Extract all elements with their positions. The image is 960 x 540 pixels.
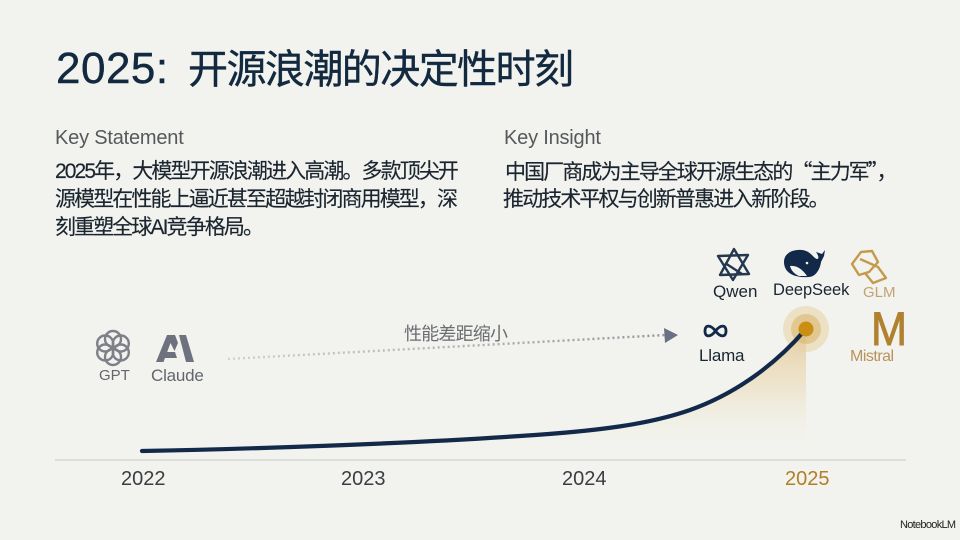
title: 2025: [56,44,169,93]
growth curve [142,330,805,451]
label: DeepSeek: DeepSeek [773,281,849,299]
heading: key insight: Key Insight [504,127,601,149]
axis label: 2022: 2022 [121,468,166,490]
title: 开源浪潮的决定性时刻 [188,48,572,92]
title [56,44,572,93]
body: key insight [503,156,896,210]
label: Claude: Claude [151,366,204,385]
body: key insight: 推动技术平权与创新普惠进入新阶段。 [503,188,828,210]
text block: key statement [55,127,458,239]
body: key statement [55,160,458,239]
label: Qwen: Qwen [713,282,757,301]
icon: DeepSeek whale [784,250,825,277]
body: key statement: 源模型在性能上逼近甚至超越封闭商用模型，深 [55,188,456,211]
area under curve [520,330,806,440]
heading: key statement: Key Statement [55,127,184,149]
icon: GLM [852,251,886,283]
icon: Claude [156,335,194,362]
axis label: 2024: 2024 [562,468,606,490]
body: key statement: 刻重塑全球AI竞争格局。 [55,216,262,239]
icon: Llama infinity [705,326,726,336]
body: key statement: 2025年，大模型开源浪潮进入高潮。多款顶尖开 [55,160,457,183]
label: GPT: GPT [99,367,130,384]
watermark: NotebookLM: NotebookLM [900,519,955,531]
axis label: 2023: 2023 [341,468,386,490]
icon: Mistral M: M [871,302,907,355]
label: Mistral: Mistral [850,348,894,365]
body: key insight: 中国厂商成为主导全球开源生态的“主力军”， [505,156,896,186]
label: Llama: Llama [699,346,744,365]
label: GLM: GLM [863,284,896,301]
icon: Qwen [718,249,749,280]
axis label: 2025: 2025 [785,468,830,490]
highlight marker 2025 [783,306,829,352]
label: performance gap narrowing: 性能差距缩小 [404,324,507,344]
dotted arrow: performance gap narrowing [228,328,678,359]
baseline axis [55,459,906,461]
icon: GPT [97,331,129,365]
text block: key insight [503,127,896,210]
marker dot 2025 [798,322,814,336]
